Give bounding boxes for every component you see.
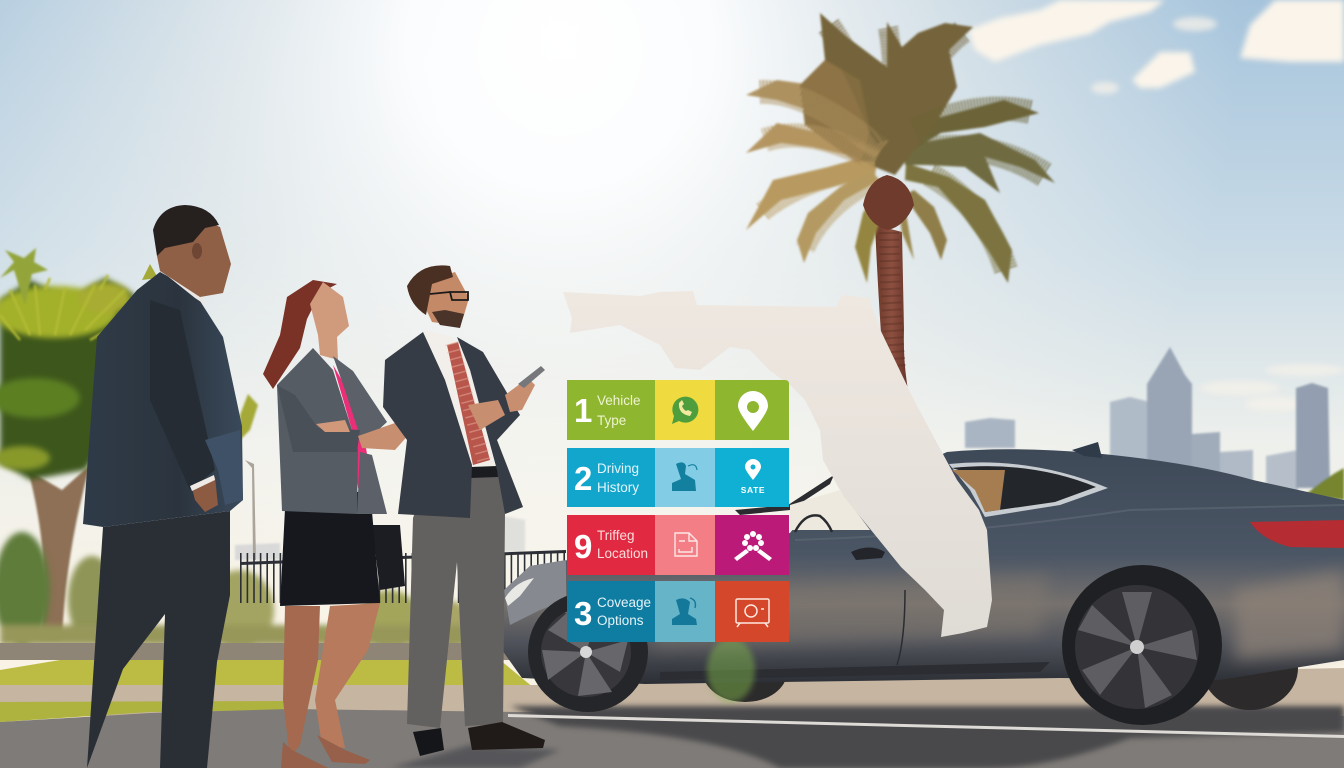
tablet [518,366,545,388]
card: driving history: 2 [574,460,592,497]
folded roof and seat [735,475,834,515]
person: man in navy suit [83,205,243,768]
lamp post [245,460,256,560]
legs [283,606,320,758]
palm trunk [875,225,908,390]
jacket [83,272,243,527]
icon: safe screen [736,599,769,627]
cuff and hand [192,477,218,512]
card: traffic location: Location [597,546,648,561]
car shadow [510,706,1344,768]
palm tree [746,13,1055,390]
canopy spikes [0,275,125,340]
car [502,442,1344,725]
body reflection [650,575,1050,650]
tree trunk [28,465,90,640]
road line [508,714,1344,738]
side window [949,462,1108,517]
jacket flap [205,430,243,505]
handbag [372,525,405,590]
palm crown bulb [863,175,914,230]
palm behind person [240,394,258,440]
card: driving history: History [597,480,639,495]
glasses [430,292,468,300]
shirt [423,330,495,466]
blazer arm and flap [333,356,387,514]
sill [660,662,1050,680]
car body [502,449,1344,684]
antenna fin [1072,442,1102,458]
card: vehicle type: Type [597,413,626,428]
icon: pin with label: SATE [741,485,765,495]
door handle [851,548,885,560]
icon: person with headset [672,598,697,625]
shoes [413,728,444,756]
hands [468,400,505,430]
hair [407,265,453,315]
trousers [407,470,505,728]
shrubs [0,532,472,650]
shirt collar [160,270,207,306]
card: traffic location: 9 [574,528,592,565]
sleeve shading [150,300,215,490]
tail light [1250,520,1344,548]
beard [432,310,464,328]
card: coverage options: Options [597,613,644,628]
curb [0,643,530,660]
person: woman in grey blazer [263,280,411,768]
Florida map [563,291,992,637]
clouds [968,0,1344,411]
factor cards [567,380,789,642]
tree canopy [0,278,135,480]
sidewalk [0,668,1344,716]
small palm top [0,248,48,305]
card: traffic location [567,515,789,575]
icon: pin with label [741,459,765,495]
belt [470,466,498,478]
card: vehicle type [567,380,789,440]
hood highlight [504,560,566,625]
card: coverage options: Coveage [597,595,651,610]
card: vehicle type: Vehicle [597,393,641,408]
hair [263,280,337,389]
icon: person with phone [672,462,697,491]
palm fronds [746,13,1055,283]
trousers [87,511,230,768]
card: driving history [567,448,789,507]
neck and face [157,215,231,297]
icon: document [675,533,697,556]
card: vehicle type: 1 [574,392,592,429]
skirt [280,489,380,606]
canopy highlights [0,282,131,470]
jacket [383,332,523,518]
card: coverage options [567,581,789,642]
people shadow [390,745,560,768]
hair [153,205,219,256]
lower lawn [0,701,285,722]
ground [0,643,1344,768]
face and neck [310,282,349,360]
ear [192,243,202,259]
face [424,272,469,326]
asphalt [0,709,1344,768]
blazer [277,348,358,514]
card: traffic location: Triffeg [597,528,635,543]
body crease [795,505,1344,540]
door seam [897,590,905,665]
front wheel [528,592,648,712]
city skyline [235,347,1344,560]
headlight [505,578,534,606]
crown mass [800,13,973,175]
card: coverage options: 3 [574,595,592,632]
card: driving history: Driving [597,461,639,476]
fence [240,550,566,578]
icon: award ribbon [734,531,772,561]
icon: chat phone [672,397,698,424]
blouse [333,365,372,488]
icon: location pin [738,391,768,431]
left tree and shrubs [0,248,566,650]
rear wheel [1062,565,1222,725]
lower arm [277,385,360,452]
shoes [281,742,328,768]
upper lawn [0,660,534,688]
person: man with glasses and tablet [383,265,545,756]
tie [447,342,490,465]
hands [358,423,411,450]
lens flare [707,638,755,702]
far wheels [703,642,787,702]
